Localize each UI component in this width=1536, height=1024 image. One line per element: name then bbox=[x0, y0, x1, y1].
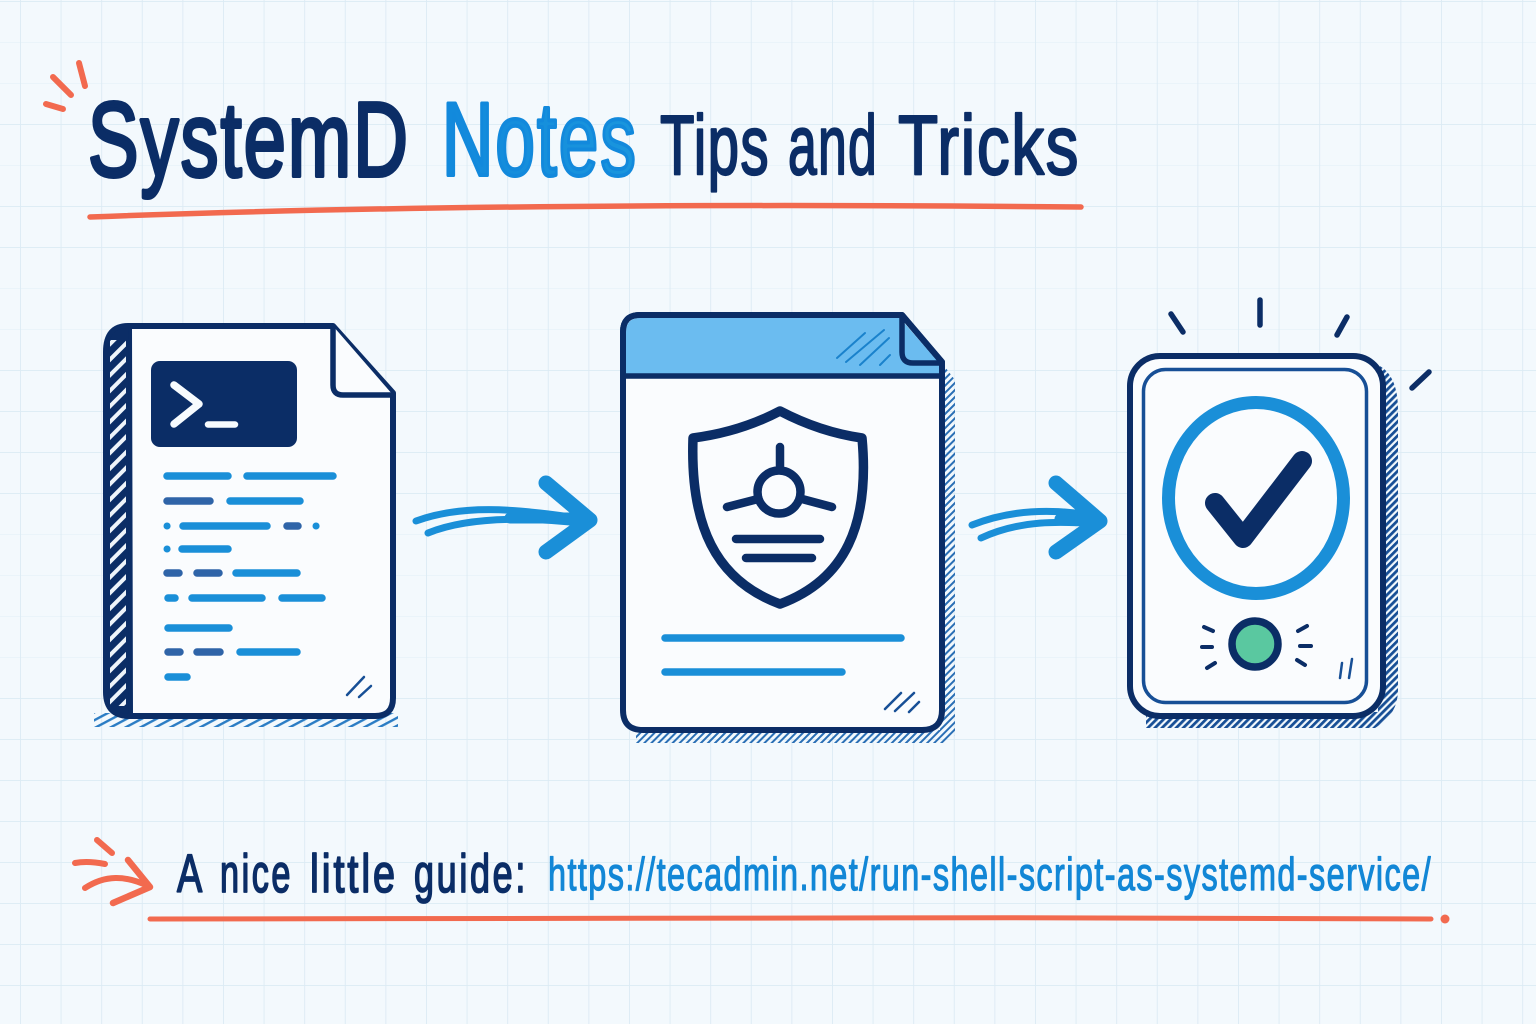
blue header bbox=[626, 318, 939, 376]
title: Tips bbox=[660, 98, 770, 192]
document page bbox=[106, 326, 393, 716]
panel: service unit file bbox=[623, 315, 955, 743]
document spine bbox=[106, 326, 131, 716]
arrow: service unit to running status bbox=[972, 483, 1100, 552]
text lines bbox=[665, 638, 901, 672]
icon: shield with service node bbox=[693, 411, 863, 604]
header hatching bbox=[837, 330, 890, 365]
sketch ticks bbox=[885, 693, 919, 712]
arrow: script to service unit bbox=[416, 483, 590, 552]
page outline top bbox=[623, 315, 942, 376]
sketch ticks bbox=[347, 677, 371, 697]
underline end dot bbox=[1440, 914, 1450, 924]
sketch ticks bbox=[1340, 659, 1352, 678]
title: SystemD bbox=[88, 81, 410, 199]
page fold bbox=[902, 318, 940, 363]
guide label: A bbox=[177, 844, 205, 904]
icon: red pointer arrow bbox=[75, 840, 150, 903]
title: Notes bbox=[442, 82, 638, 198]
glow rays bbox=[1171, 300, 1429, 388]
icon: terminal prompt bbox=[151, 361, 297, 447]
header divider bbox=[623, 373, 942, 379]
title: Tricks bbox=[898, 98, 1080, 192]
panel: running status device bbox=[1130, 300, 1429, 728]
guide label: guide: bbox=[414, 844, 528, 904]
shadow hatch under document bbox=[94, 713, 398, 727]
title bbox=[88, 81, 1080, 199]
footer underline bbox=[150, 918, 1431, 919]
spine hatching bbox=[110, 340, 126, 706]
inner screen bbox=[1144, 370, 1366, 702]
shadow hatch bbox=[636, 363, 955, 743]
icon: red spark marks bbox=[46, 63, 85, 109]
page body bbox=[623, 315, 942, 730]
title: and bbox=[788, 98, 878, 192]
guide label bbox=[177, 844, 528, 904]
icon: check in ring bbox=[1168, 402, 1344, 594]
page fold bbox=[333, 326, 393, 395]
panel: script document bbox=[94, 326, 398, 727]
code lines bbox=[167, 476, 333, 677]
title underline bbox=[90, 206, 1081, 217]
device body bbox=[1130, 356, 1383, 716]
guide label: nice bbox=[220, 844, 293, 904]
icon: green status light bbox=[1202, 621, 1311, 668]
guide label: little bbox=[310, 844, 398, 904]
shadow hatch bbox=[1146, 365, 1398, 728]
